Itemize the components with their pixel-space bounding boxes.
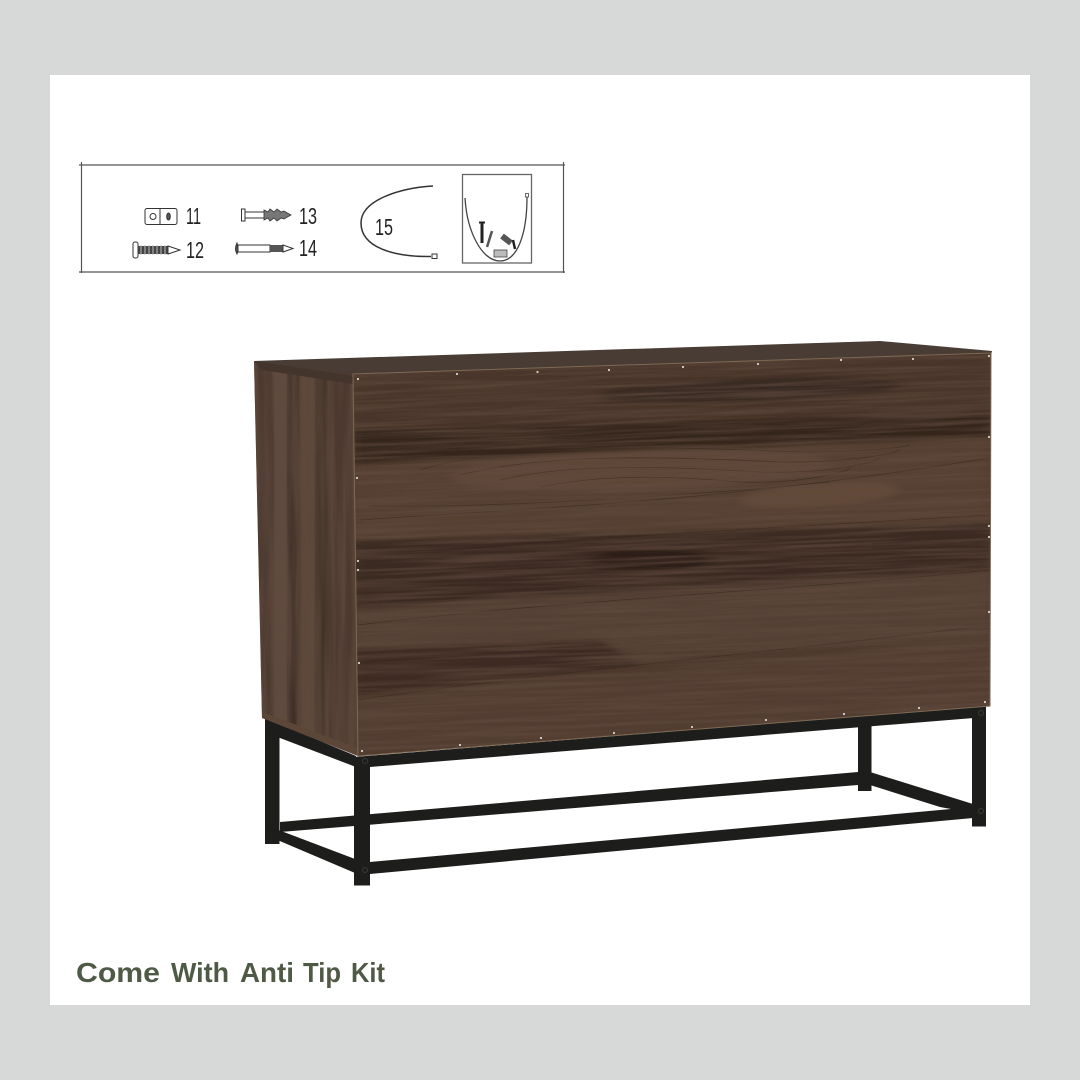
furniture: cabinet side panel	[254, 360, 359, 760]
rear left leg	[265, 722, 280, 844]
icon: part 15 cable	[361, 186, 437, 258]
furniture: cabinet back panel	[352, 352, 992, 756]
icon: part 14 long screw	[236, 243, 293, 254]
front top rail	[354, 706, 986, 767]
rear right leg	[858, 726, 872, 791]
label: 11: 11	[186, 203, 201, 229]
caption: Anti	[240, 957, 294, 988]
label: 15: 15	[375, 214, 393, 240]
label: 12: 12	[186, 237, 204, 263]
parts box frame	[79, 162, 565, 273]
wood bands	[354, 374, 990, 695]
white card panel	[50, 75, 1030, 1005]
left top side rail	[265, 718, 356, 767]
caption: With	[171, 957, 229, 988]
wood fine grain overlay	[354, 356, 990, 747]
leg bolts	[362, 710, 984, 872]
front right leg	[972, 708, 986, 826]
icon: part 13 wall anchor	[242, 209, 291, 221]
screw dots	[356, 355, 990, 752]
left lower side rail	[268, 826, 355, 873]
caption: Tip	[303, 957, 341, 988]
label: 13: 13	[299, 203, 317, 229]
icon: packaged kit bag	[462, 174, 532, 263]
caption	[76, 957, 385, 988]
caption: Come	[76, 957, 160, 988]
rear lower rail	[280, 772, 858, 832]
front left leg	[354, 760, 370, 886]
label: 14: 14	[299, 235, 317, 261]
icon: part 11 bracket	[145, 208, 177, 224]
right lower side rail	[870, 772, 973, 813]
wood cathedral grain	[358, 445, 990, 700]
caption: Kit	[351, 957, 385, 988]
panel edge line	[353, 353, 991, 756]
front lower rail	[370, 807, 973, 874]
furniture: metal leg frame	[265, 706, 986, 886]
icon: part 12 screw	[133, 242, 180, 258]
panel: anti tip kit parts diagram	[79, 162, 565, 273]
furniture: cabinet top face	[254, 341, 992, 378]
